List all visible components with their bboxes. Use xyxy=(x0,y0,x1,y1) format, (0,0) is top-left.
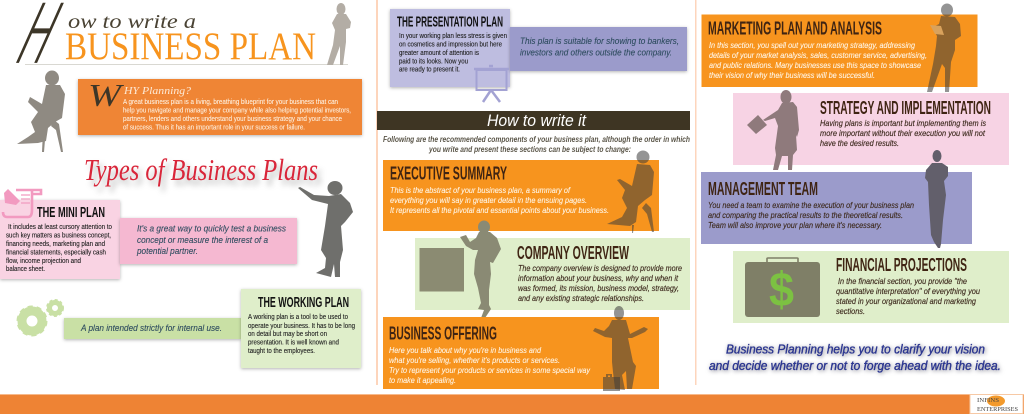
icon: presentation easel xyxy=(474,66,509,102)
callout: mini plan summary: It's a great way to quickly test a business xyxy=(137,224,286,234)
title: BUSINESS PLAN xyxy=(65,25,316,68)
panel: the working plan xyxy=(241,289,361,368)
panel: management team xyxy=(701,150,972,248)
icon: gears xyxy=(18,300,63,335)
heading: the presentation plan: THE PRESENTATION PLAN xyxy=(397,14,503,30)
management text: Team will also improve your plan where it's necessary. xyxy=(708,221,882,230)
working plan text: on detail but may be short on xyxy=(248,331,327,338)
icon: woman with folder silhouette xyxy=(747,90,799,170)
executive summary text: This is the abstract of your business plan, a summary of xyxy=(390,186,571,195)
icon: woman with clipboard silhouette xyxy=(927,4,961,92)
executive summary text: everything you will say in greater detail in the ensuing pages. xyxy=(390,196,587,205)
heading: the working plan: THE WORKING PLAN xyxy=(258,294,349,311)
closing statement: and decide whether or not to forge ahead with the idea. xyxy=(709,359,1001,373)
heading: why planning xyxy=(88,77,192,113)
executive summary text xyxy=(390,186,609,215)
financial text xyxy=(836,277,981,316)
heading: management team: MANAGEMENT TEAM xyxy=(708,179,818,199)
company overview text: and any existing strategic relationships. xyxy=(518,294,644,303)
logo: ENTERPRISES xyxy=(977,407,1018,413)
working plan text: operate your business. It has to be long xyxy=(248,323,355,330)
why planning text xyxy=(123,97,351,132)
icon: pencil and note xyxy=(3,189,41,217)
closing statement xyxy=(709,342,1001,373)
marketing text xyxy=(709,41,927,80)
icon: standing man silhouette xyxy=(925,150,948,248)
working plan text: presentation. It is well known and xyxy=(248,340,339,346)
why planning text: of success. Thus it has an important role in your success or failure. xyxy=(123,122,305,132)
why planning text: A great business plan is a living, breathing blueprint for your business that can xyxy=(123,97,338,106)
financial text: In the financial section, you provide "the xyxy=(838,277,967,286)
mini plan text: It includes at least cursory attention to xyxy=(8,224,112,231)
heading: why planning: W xyxy=(88,77,125,113)
strategy text: more important without their execution you will not xyxy=(820,129,986,138)
image placeholder square xyxy=(420,248,464,292)
mini plan text: balance sheet. xyxy=(6,266,45,273)
panel: executive summary xyxy=(383,150,659,233)
panel: financial projections xyxy=(733,251,1009,323)
financial text: stated in your organizational and marketing xyxy=(836,297,977,306)
callout: working plan summary: A plan intended strictly for internal use. xyxy=(80,323,222,334)
callout: presentation plan summary: This plan is suitable for showing to bankers, xyxy=(520,36,679,47)
mini plan text: flow, income projection and xyxy=(6,258,81,265)
marketing text: In this section, you spell out your marketing strategy, addressing xyxy=(709,41,915,50)
company overview text: The company overview is designed to provide more xyxy=(518,264,682,273)
callout: presentation plan summary xyxy=(510,27,687,71)
callout: mini plan summary: potential partner. xyxy=(136,246,198,257)
title: ow to write a xyxy=(68,11,196,33)
presentation plan text: on cosmetics and impression but here xyxy=(399,42,502,48)
why planning text: help you navigate and manage your company while also helping potential investors, xyxy=(123,106,351,114)
management text xyxy=(708,201,914,230)
heading band: how to write it: How to write it xyxy=(487,111,587,130)
heading: executive summary: EXECUTIVE SUMMARY xyxy=(390,164,507,184)
icon: woman pointing silhouette xyxy=(298,181,353,277)
panel: the presentation plan xyxy=(390,9,510,87)
working plan text: A working plan is a tool to be used to xyxy=(248,314,348,321)
strategy text: have the desired results. xyxy=(820,139,899,148)
callout: mini plan summary: concept or measure the interest of a xyxy=(137,235,268,246)
icon: clipboard xyxy=(930,25,944,35)
strategy text: Having plans is important but implementing them is xyxy=(820,119,986,128)
footer band xyxy=(0,394,1024,414)
presentation plan text: In your working plan less stress is given xyxy=(399,33,507,40)
marketing text: and public relations. Many businesses use this space to showcase xyxy=(709,61,921,70)
company overview text: information about your business, why and when it xyxy=(518,274,679,283)
logo: INFINS xyxy=(977,398,999,404)
icon: briefcase with dollar: $ xyxy=(769,264,794,317)
icon: woman with briefcase silhouette xyxy=(593,306,648,391)
intro text xyxy=(383,135,690,154)
panel: strategy and implementation xyxy=(733,90,1009,170)
presentation plan text: greater amount of attention is xyxy=(399,50,479,57)
logo xyxy=(970,394,1023,414)
mini plan text: financing needs, marketing plan and xyxy=(6,241,105,248)
heading: marketing plan and analysis: MARKETING PLAN AND ANALYSIS xyxy=(708,18,882,38)
mini plan text: such key matters as business concept, xyxy=(6,232,111,240)
heading: company overview: COMPANY OVERVIEW xyxy=(517,243,629,263)
business offering text: what you're selling, whether it's products or services. xyxy=(389,356,560,365)
business offering text: Try to represent your products or services in some special way xyxy=(389,366,591,375)
financial text: sections. xyxy=(836,307,865,316)
working plan text xyxy=(248,314,355,355)
icon: woman with notebook silhouette xyxy=(327,3,351,65)
title xyxy=(4,0,316,81)
working plan text: taught to the employees. xyxy=(248,348,315,355)
panel: marketing plan and analysis xyxy=(702,4,978,92)
business offering text xyxy=(389,346,591,385)
callout: mini plan summary xyxy=(120,218,297,264)
why planning text: partners, lenders and others understand your business strategy and your chance xyxy=(123,114,342,123)
marketing text: details of your market analysis, sales, customer service, advertising, xyxy=(709,51,927,60)
panel: the mini plan xyxy=(0,189,120,279)
executive summary text: It represents all the pivotal and essential points about your business. xyxy=(390,206,609,215)
mini plan text: financial statements, especially cash xyxy=(6,250,106,256)
business offering text: to make it appealing. xyxy=(389,376,456,385)
heading: types of business plans: Types of Business Plans xyxy=(84,152,318,187)
heading: the mini plan: THE MINI PLAN xyxy=(37,204,105,221)
presentation plan text: paid to its looks. Now you xyxy=(399,58,468,66)
strategy text xyxy=(820,119,986,148)
callout: working plan summary xyxy=(64,318,241,339)
mini plan text xyxy=(6,224,112,273)
management text: You need a team to examine the execution of your business plan xyxy=(708,201,914,210)
company overview text xyxy=(518,264,682,303)
panel: business offering xyxy=(383,306,659,391)
company overview text: was formed, its mission, business model, strategy, xyxy=(518,284,679,293)
intro text: you write and present these sections can be subject to change: xyxy=(428,145,631,154)
icon: briefcase with dollar xyxy=(745,258,820,317)
heading: why planning: HY Planning? xyxy=(123,85,192,97)
icon: seated woman with laptop silhouette xyxy=(17,70,65,152)
icon: standing woman silhouette xyxy=(460,220,501,318)
callout: presentation plan summary: investors and others outside the company. xyxy=(520,48,672,58)
icon: seated woman silhouette xyxy=(607,150,654,233)
heading: business offering: BUSINESS OFFERING xyxy=(389,324,497,344)
business offering text: Here you talk about why you're in business and xyxy=(389,346,541,355)
heading band: how to write it xyxy=(377,111,690,130)
presentation plan text xyxy=(399,33,507,74)
intro text: Following are the recommended components of your business plan, although the order in which xyxy=(383,135,690,144)
management text: and comparing the practical results to the theoretical results. xyxy=(708,211,903,220)
panel: why planning xyxy=(78,77,362,135)
financial text: quantitative interpretation" of everything you xyxy=(836,287,981,296)
presentation plan text: are ready to present it. xyxy=(399,66,460,74)
panel: company overview xyxy=(415,220,690,318)
closing statement: Business Planning helps you to clarify your vision xyxy=(726,342,985,356)
marketing text: their vision of why their business will be successful. xyxy=(709,71,875,80)
